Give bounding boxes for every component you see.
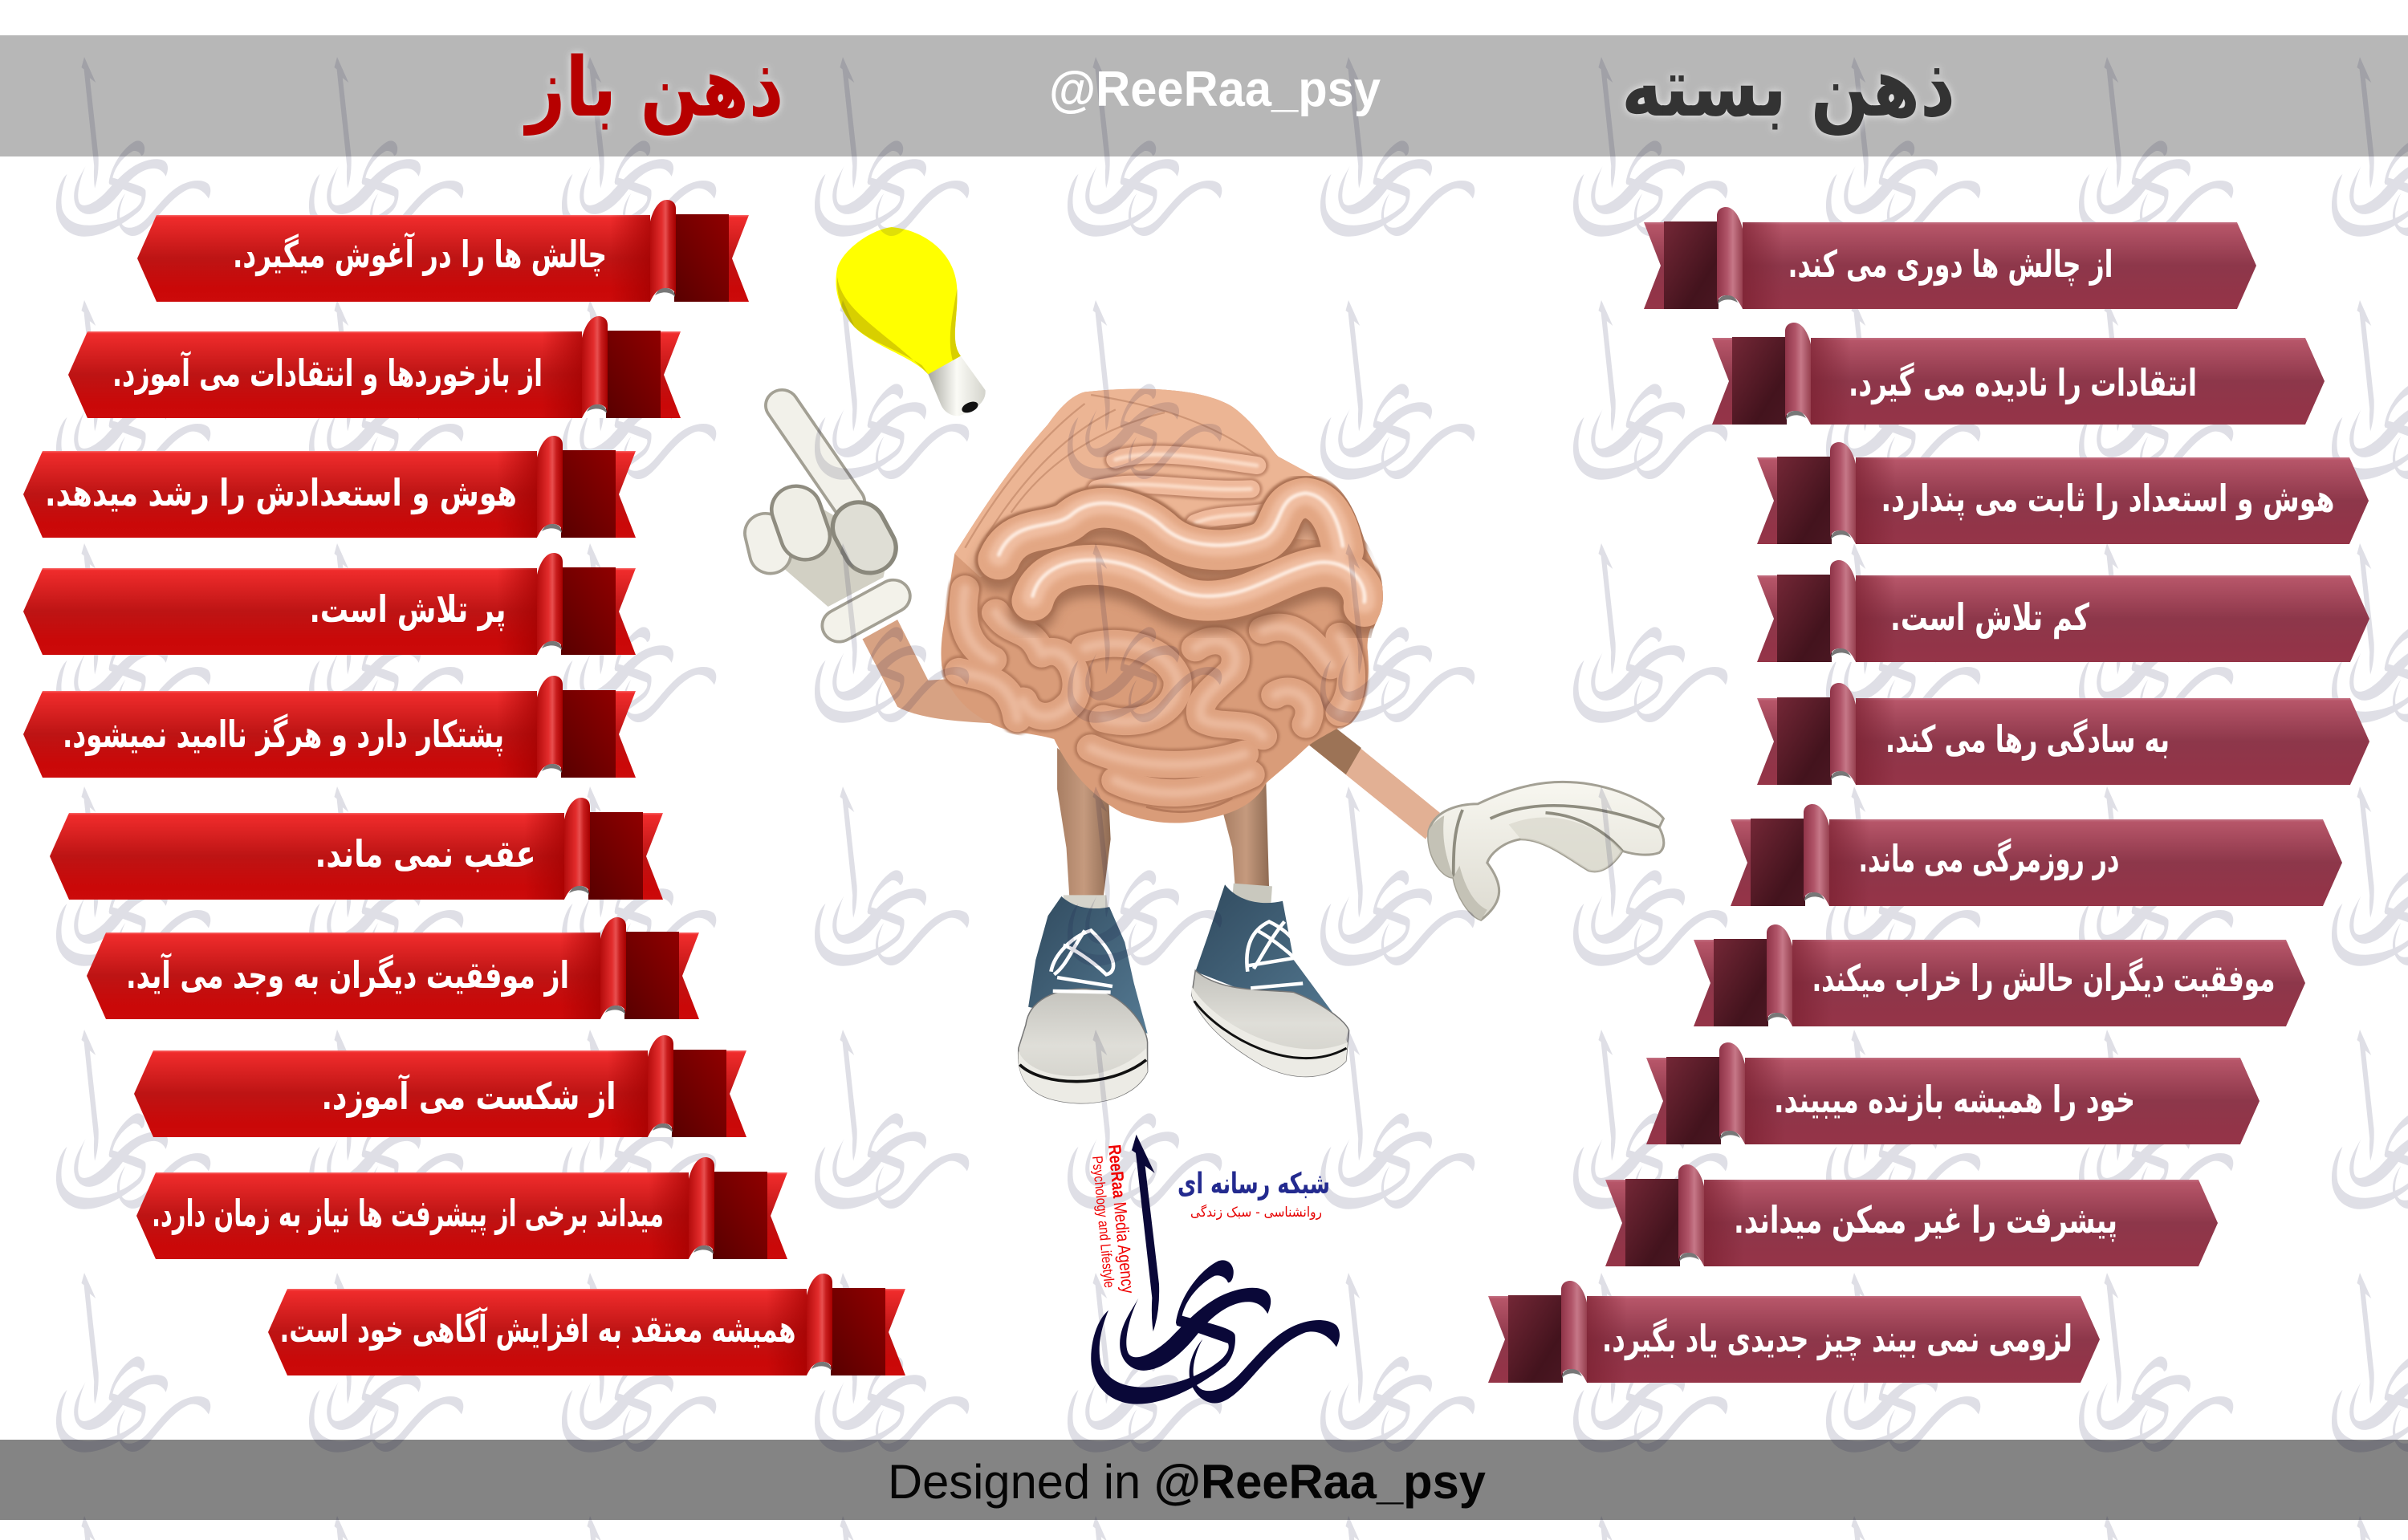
ribbon 2 xyxy=(68,316,681,418)
logo rotated name: ReeRaa Media Agency xyxy=(1104,1144,1138,1294)
ribbon 1 xyxy=(137,200,749,302)
footer band xyxy=(0,1440,2408,1520)
ribbon 4: پر تلاش است. xyxy=(310,587,506,632)
left leg xyxy=(1057,748,1111,898)
icon: light bulb xyxy=(836,227,986,416)
ribbon 8: از شکست می آموزد. xyxy=(321,1074,616,1118)
ribbon 9 xyxy=(1605,1164,2218,1266)
ribbon 7: از موفقیت دیگران به وجد می آید. xyxy=(126,953,569,997)
ribbon 4: کم تلاش است. xyxy=(1890,595,2089,639)
ribbon 5: به سادگی رها می کند. xyxy=(1885,717,2170,761)
ribbon 6 xyxy=(1731,804,2342,906)
left arm xyxy=(862,620,993,723)
heading: closed mind: ذهن بسته xyxy=(1621,40,1955,136)
ribbon 2: انتقادات را نادیده می گیرد. xyxy=(1849,361,2197,404)
logo subtitle: روانشناسی - سبک زندگی xyxy=(1190,1204,1322,1221)
ribbon 4 xyxy=(1757,560,2369,662)
right leg xyxy=(1223,780,1269,891)
ribbon 3 xyxy=(23,436,636,538)
ribbon 8 xyxy=(1646,1042,2260,1144)
right arm xyxy=(1309,721,1440,839)
ribbon 5 xyxy=(23,676,636,778)
ribbon 1: از چالش ها دوری می کند. xyxy=(1788,242,2113,286)
logo rotated tagline: Psychology and Lifestyle xyxy=(1089,1156,1117,1289)
ribbon 5: پشتکار دارد و هرگز ناامید نمیشود. xyxy=(63,713,504,757)
ribbon 10 xyxy=(1488,1281,2100,1383)
icon: left gloved hand xyxy=(766,405,893,626)
ribbon 2 xyxy=(1712,323,2325,425)
panel: open mind ribbons xyxy=(23,200,905,1375)
illustration: brain character with light bulb xyxy=(766,227,1664,1103)
ribbon 10 xyxy=(268,1274,905,1375)
ribbon 9: پیشرفت را غیر ممکن میداند. xyxy=(1734,1198,2117,1242)
ribbon 5 xyxy=(1757,683,2369,785)
icon: right gloved hand xyxy=(1429,782,1664,920)
ribbon 8: خود را همیشه بازنده میبیند. xyxy=(1774,1078,2135,1121)
ribbon 6: عقب نمی ماند. xyxy=(315,832,536,876)
ribbon 1 xyxy=(1644,207,2256,309)
ribbon 7 xyxy=(1694,924,2305,1026)
icon: right sneaker xyxy=(1192,884,1349,1076)
icon: left sneaker xyxy=(1019,895,1148,1103)
ribbon 8 xyxy=(134,1035,746,1137)
logo mark xyxy=(1091,1135,1340,1404)
footer credit: Designed in @ReeRaa_psy xyxy=(888,1455,1487,1509)
ribbon 6: در روزمرگی می ماند. xyxy=(1859,837,2119,880)
logo title: شبکه رسانه ای xyxy=(1178,1168,1330,1201)
heading: open mind: ذهن باز xyxy=(523,40,783,136)
panel: closed mind ribbons xyxy=(1488,207,2369,1383)
ribbon 2: از بازخوردها و انتقادات می آموزد. xyxy=(112,351,543,395)
logo: ReeRaa media agency xyxy=(1089,1135,1340,1404)
ribbon 9: میداند برخی از پیشرفت ها نیاز به زمان دارد. xyxy=(152,1192,664,1236)
ribbon 3 xyxy=(1757,442,2369,544)
ribbon 7 xyxy=(87,917,699,1019)
handle text: @ReeRaa_psy xyxy=(1049,62,1381,117)
ribbon 3: هوش و استعدادش را رشد میدهد. xyxy=(45,471,517,514)
header band xyxy=(0,35,2408,156)
ribbon 4 xyxy=(23,553,636,655)
ribbon 10: لزومی نمی بیند چیز جدیدی یاد بگیرد. xyxy=(1602,1317,2072,1361)
ribbon 10: همیشه معتقد به افزایش آگاهی خود است. xyxy=(279,1306,796,1351)
ribbon 9 xyxy=(136,1157,787,1259)
ribbon 1: چالش ها را در آغوش میگیرد. xyxy=(233,232,607,277)
ribbon 6 xyxy=(50,798,663,900)
brain xyxy=(941,389,1380,823)
